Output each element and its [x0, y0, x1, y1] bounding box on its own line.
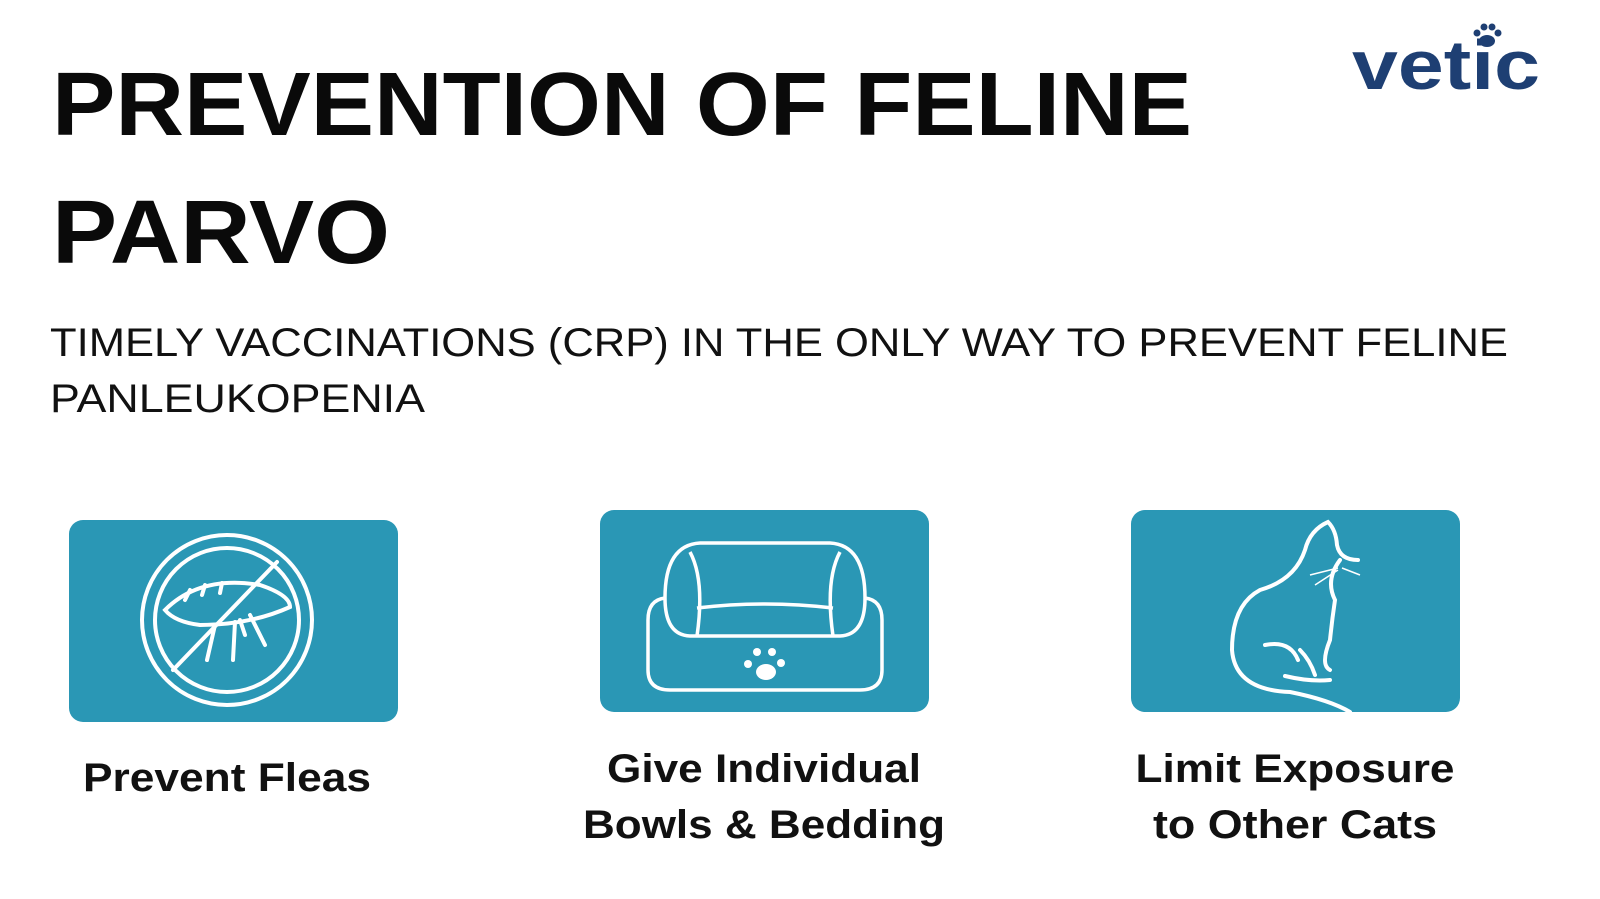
- panel: bowls and bedding: [583, 510, 945, 847]
- label: Prevent Fleas: [83, 756, 371, 800]
- label: Bowls & Bedding: [583, 803, 945, 847]
- panel: limit exposure: [1131, 510, 1460, 847]
- label: [583, 747, 945, 847]
- subtitle: [50, 321, 1508, 421]
- label: Give Individual: [607, 747, 921, 791]
- label: to Other Cats: [1153, 803, 1437, 847]
- title: PREVENTION OF FELINE: [52, 55, 1192, 155]
- subtitle: PANLEUKOPENIA: [50, 377, 425, 421]
- subtitle: TIMELY VACCINATIONS (CRP) IN THE ONLY WAY TO PREVENT FELINE: [50, 321, 1508, 365]
- label: [1136, 747, 1454, 847]
- icon: pet bed: [648, 543, 882, 690]
- title: PARVO: [52, 183, 390, 283]
- icon: no flea: [142, 535, 312, 705]
- panel: prevent fleas: [69, 520, 398, 800]
- label: Limit Exposure: [1136, 747, 1454, 791]
- title: [52, 55, 1192, 283]
- icon: cat: [1232, 522, 1358, 712]
- logo: vetic: vetic: [1352, 26, 1540, 104]
